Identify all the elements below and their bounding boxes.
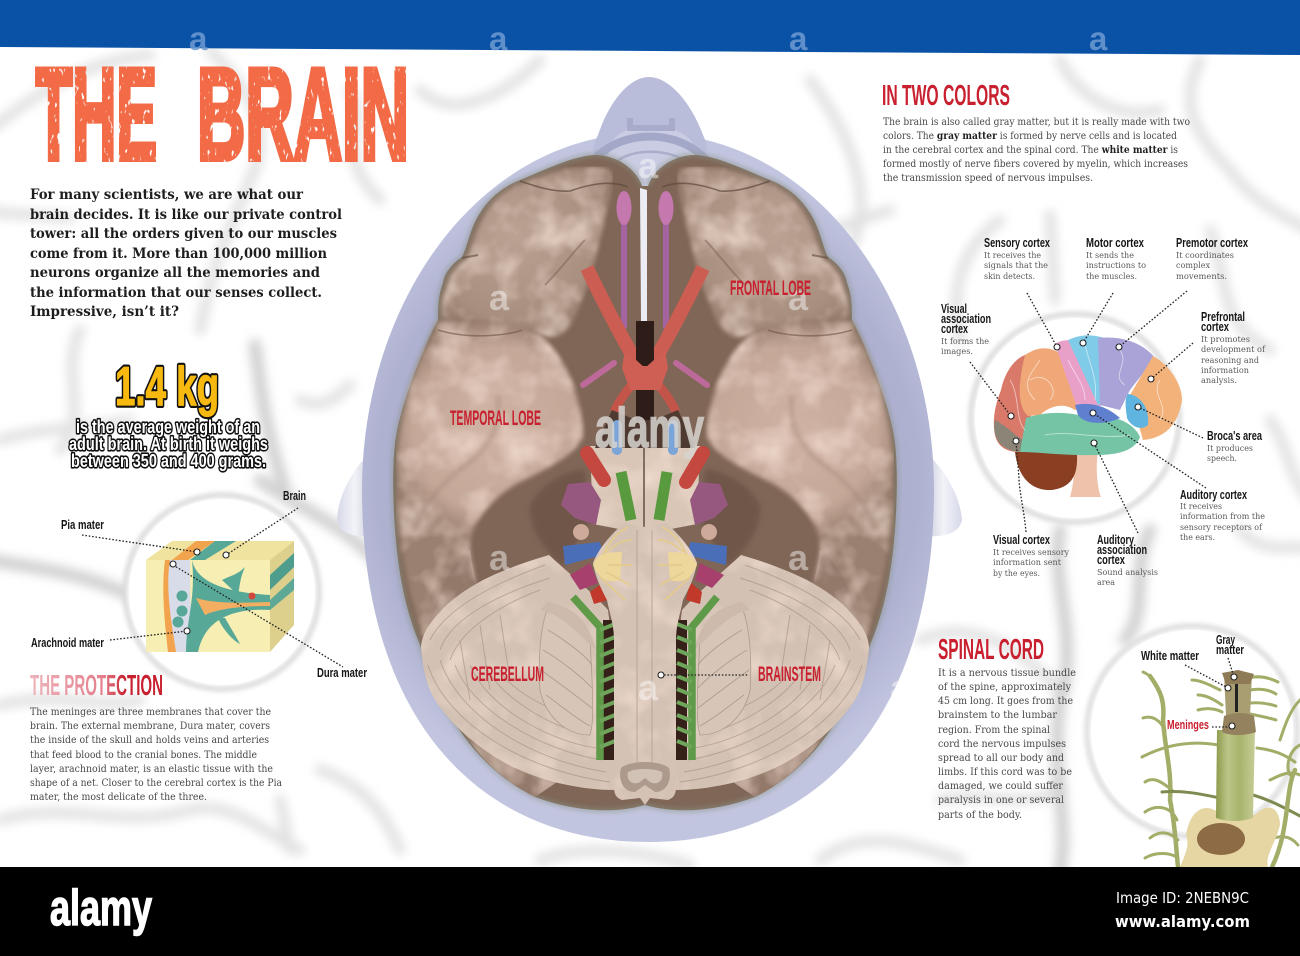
intro paragraph	[30, 187, 342, 320]
text: spinal cord: brainstem to the lumbar	[938, 710, 1057, 721]
yellow cerebellar peduncles	[593, 527, 697, 600]
artery junction and midline fissure	[622, 188, 668, 422]
label: prefrontal cortex: development of	[1201, 344, 1266, 354]
intro paragraph: neurons organize all the memories and	[30, 265, 320, 281]
left brain hemisphere	[393, 155, 645, 810]
label: auditory association cortex: association	[1097, 543, 1147, 557]
text: in two colors	[883, 117, 1190, 184]
cranial nerves pieces	[561, 482, 728, 604]
label: visual association cortex: It forms the	[941, 336, 989, 346]
label: sensory cortex: skin detects.	[984, 271, 1035, 281]
label: auditory cortex: information from the	[1180, 511, 1265, 521]
title: THE	[35, 41, 157, 187]
brainstem	[593, 523, 697, 805]
black footer	[0, 867, 1300, 956]
callouts: protection diagram: Arachnoid mater	[31, 636, 104, 650]
text: the protection: layer, arachnoid mater, is an elastic tissue with the	[30, 764, 273, 775]
label: auditory cortex: Auditory cortex	[1180, 488, 1247, 502]
text: spinal cord: damaged, we could suffer	[938, 781, 1063, 792]
footer image id and url	[1115, 889, 1250, 931]
stat caption: adult brain. At birth it weighs	[69, 433, 268, 454]
footer logo: alamy	[50, 880, 152, 936]
watermarks on the blue band	[189, 20, 1108, 57]
label: prefrontal cortex: analysis.	[1201, 375, 1237, 385]
spinal cord callouts: Meninges	[1167, 718, 1209, 732]
intro paragraph: Impressive, isn’t it?	[30, 304, 179, 320]
label: prefrontal cortex	[1201, 310, 1266, 385]
text: spinal cord: limbs. If this cord was to be	[938, 767, 1072, 778]
spinal cord illustration	[1142, 670, 1300, 867]
label: visual association cortex: association	[941, 312, 991, 326]
label: auditory association cortex: Auditory	[1097, 533, 1134, 547]
text: spinal cord: 45 cm long. It goes from the	[938, 696, 1073, 707]
label: auditory association cortex	[1097, 533, 1158, 587]
watermarks on the blue band: a	[789, 20, 808, 57]
watermarks on the blue band: a	[189, 20, 208, 57]
label: visual cortex: Visual cortex	[993, 533, 1050, 547]
label: prefrontal cortex: It promotes	[1201, 334, 1250, 344]
stat: 1.4 kg: 1.4 kg	[115, 355, 219, 417]
footer image id and url: www.alamy.com	[1115, 912, 1250, 931]
midbrain block	[587, 410, 703, 530]
tiled watermark letters: a	[788, 537, 809, 578]
label: prefrontal cortex: information	[1201, 365, 1250, 375]
central watermark: alamy	[595, 396, 704, 459]
cerebellum lobe	[421, 555, 620, 790]
stat: 1.4 kg: 1.4 kg	[115, 355, 219, 417]
heading: in two colors: IN TWO COLORS	[882, 80, 1010, 112]
stat caption: between 350 and 400 grams.	[71, 450, 266, 471]
tiled watermark letters: a	[638, 667, 659, 708]
text: spinal cord: of the spine, approximately	[938, 682, 1071, 693]
magnifier ring: protection	[125, 495, 319, 689]
central head silhouette	[337, 77, 962, 842]
intro paragraph: come from it. More than 100,000 million	[30, 246, 327, 262]
label: visual cortex: It receives sensory	[993, 547, 1069, 557]
top blue band	[0, 0, 1300, 55]
stronger background strands	[0, 345, 1150, 870]
label: sensory cortex: signals that the	[984, 260, 1048, 270]
stat: 1.4 kg	[115, 355, 219, 417]
spinal cord callouts: matter	[1216, 643, 1244, 657]
label: auditory cortex: the ears.	[1180, 532, 1215, 542]
text: spinal cord: parts of the body.	[938, 810, 1022, 821]
spinal cord callouts: Gray	[1216, 633, 1235, 647]
lobe labels	[450, 277, 821, 686]
text: in two colors: in the cerebral cortex and the spinal cord. The white matter is	[883, 145, 1178, 156]
label: motor cortex	[1086, 236, 1146, 281]
label: auditory cortex: It receives	[1180, 501, 1222, 511]
label: visual cortex: by the eyes.	[993, 568, 1040, 578]
tiled watermark letters: a	[489, 537, 510, 578]
label: sensory cortex: It receives the	[984, 250, 1041, 260]
text: the protection: that feed blood to the cranial bones. The middle	[30, 750, 257, 761]
label: premotor cortex	[1176, 236, 1248, 281]
lobe labels: FRONTAL LOBE	[730, 277, 811, 300]
title: BRAIN	[197, 41, 409, 187]
text: in two colors: colors. The gray matter is formed by nerve cells and is located	[883, 131, 1178, 142]
text: in two colors: formed mostly of nerve fibers covered by myelin, which increases	[883, 159, 1188, 170]
label: motor cortex: the muscles.	[1086, 271, 1137, 281]
lobe labels: BRAINSTEM	[758, 663, 821, 686]
tiled watermark letters: a	[638, 145, 659, 186]
heading: the protection: THE PROTECTION	[30, 670, 163, 702]
spinal cord callouts	[1141, 633, 1244, 732]
label: premotor cortex: complex	[1176, 260, 1210, 270]
lobe labels: TEMPORAL LOBE	[450, 407, 541, 430]
green nerve ribbons	[573, 597, 717, 760]
text: in two colors: The brain is also called gray matter, but it is really made with two	[883, 117, 1190, 128]
text: the protection: the inside of the skull and holds veins and arteries	[30, 735, 269, 746]
text: the protection: The meninges are three membranes that cover the	[30, 707, 271, 718]
callouts: protection diagram: Brain	[283, 489, 306, 503]
intro paragraph: tower: all the orders given to our muscles	[30, 226, 337, 242]
label: auditory association cortex: area	[1097, 577, 1115, 587]
tiled watermark letters: a	[890, 667, 911, 708]
heading: spinal cord: SPINAL CORD	[938, 634, 1044, 666]
label: visual association cortex: images.	[941, 346, 973, 356]
title	[35, 41, 409, 187]
lobe labels: CEREBELLUM	[471, 663, 544, 686]
spinal cord callouts: White matter	[1141, 649, 1199, 663]
label: motor cortex: Motor cortex	[1086, 236, 1144, 250]
text: the protection: mater, the most delicate of the three.	[30, 792, 207, 803]
label: sensory cortex	[984, 236, 1050, 281]
intro paragraph: the information that our senses collect.	[30, 285, 322, 301]
tiled watermark letters: a	[788, 277, 809, 318]
meninges cube diagram	[146, 541, 294, 652]
label: auditory association cortex: cortex	[1097, 553, 1125, 567]
right brain hemisphere (mirrored)	[645, 155, 897, 810]
text: spinal cord: It is a nervous tissue bundle	[938, 668, 1076, 679]
label: auditory cortex	[1180, 488, 1265, 542]
text: spinal cord: cord the nervous impulses	[938, 739, 1066, 750]
stat caption: is the average weight of an	[76, 416, 260, 437]
tiled watermark letters	[489, 145, 911, 708]
label: broca's area	[1207, 429, 1263, 463]
label: auditory association cortex: Sound analysis	[1097, 567, 1158, 577]
watermarks on the blue band: a	[489, 20, 508, 57]
label: broca's area: speech.	[1207, 453, 1237, 463]
text: in two colors: the transmission speed of nervous impulses.	[883, 173, 1093, 184]
label: auditory cortex: sensory receptors of	[1180, 522, 1263, 532]
callouts: protection diagram	[31, 489, 367, 680]
stat caption	[69, 416, 268, 471]
label: prefrontal cortex: cortex	[1201, 320, 1229, 334]
text: spinal cord: region. From the spinal	[938, 725, 1050, 736]
text: the protection: brain. The external membrane, Dura mater, covers	[30, 721, 270, 732]
label: prefrontal cortex: reasoning and	[1201, 355, 1260, 365]
label: premotor cortex: It coordinates	[1176, 250, 1234, 260]
brainstem callout	[658, 672, 748, 678]
label: visual cortex	[993, 533, 1069, 578]
text: spinal cord: paralysis in one or several	[938, 795, 1064, 806]
footer image id and url: Image ID: 2NEBN9C	[1116, 889, 1249, 907]
magnifier ring: spinal cord	[1087, 626, 1297, 836]
label: sensory cortex: Sensory cortex	[984, 236, 1050, 250]
label: broca's area: It produces	[1207, 443, 1253, 453]
label: prefrontal cortex: Prefrontal	[1201, 310, 1245, 324]
magnifier ring: cortex	[971, 314, 1179, 522]
intro paragraph: For many scientists, we are what our	[30, 187, 304, 203]
text: the protection	[30, 707, 282, 803]
label: motor cortex: instructions to	[1086, 260, 1146, 270]
callouts: protection diagram: Pia mater	[61, 518, 104, 532]
label: premotor cortex: movements.	[1176, 271, 1227, 281]
text: spinal cord: spread to all our body and	[938, 753, 1065, 764]
callouts: protection diagram: Dura mater	[317, 666, 367, 680]
label: visual association cortex: cortex	[941, 322, 968, 336]
label: broca's area: Broca's area	[1207, 429, 1263, 443]
left artery and lateral vessels	[583, 191, 642, 410]
cortex callout lines	[970, 291, 1206, 533]
intro paragraph: brain decides. It is like our private control	[30, 207, 342, 223]
label: premotor cortex: Premotor cortex	[1176, 236, 1248, 250]
label: visual association cortex	[941, 302, 991, 356]
side-view brain	[994, 335, 1182, 497]
tiled watermark letters: a	[489, 277, 510, 318]
text: spinal cord	[938, 668, 1076, 821]
watermarks on the blue band: a	[1089, 20, 1108, 57]
label: motor cortex: It sends the	[1086, 250, 1134, 260]
text: the protection: shape of a net. Closer to the cerebral cortex is the Pia	[30, 778, 282, 789]
label: visual cortex: information sent	[993, 557, 1062, 567]
label: visual association cortex: Visual	[941, 302, 967, 316]
